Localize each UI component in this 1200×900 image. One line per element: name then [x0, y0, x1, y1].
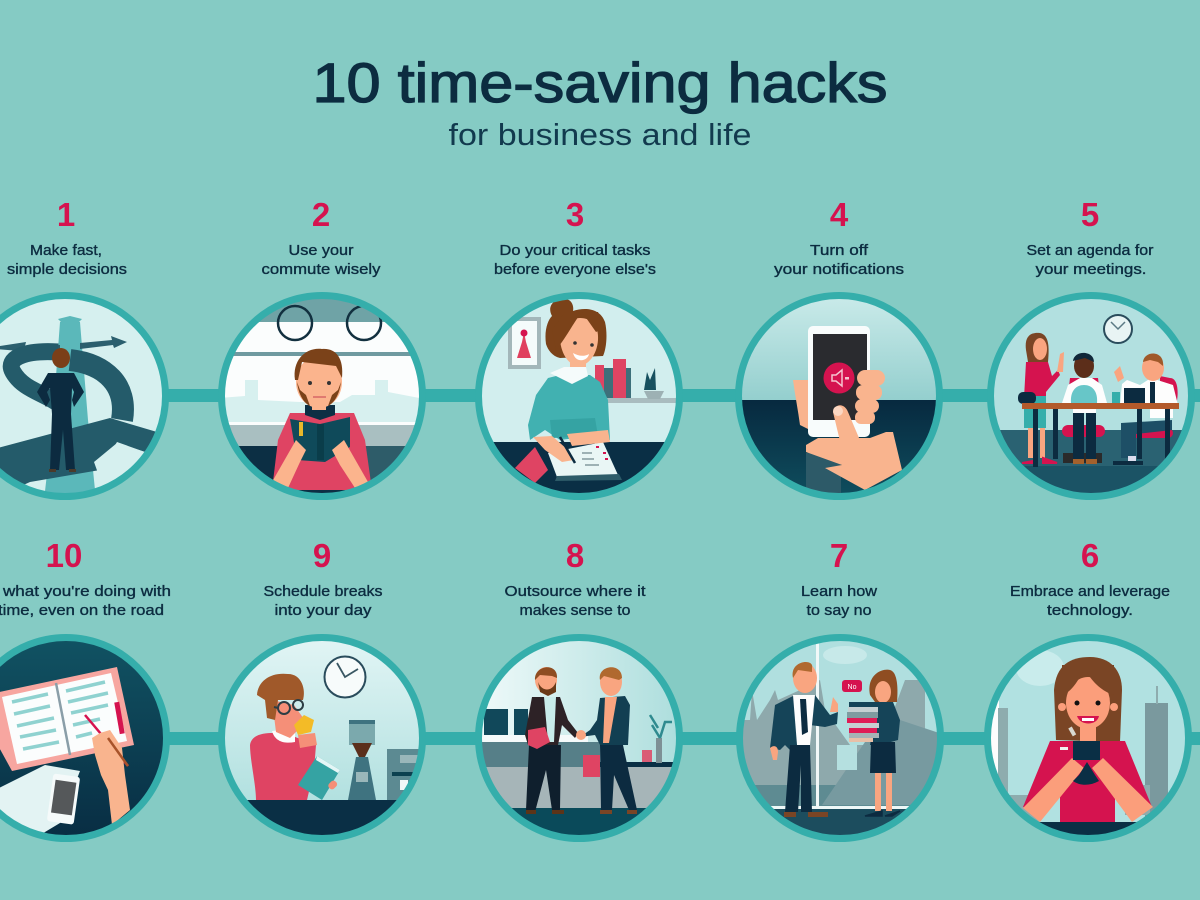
ring [478, 638, 680, 838]
man at laptop [1062, 353, 1107, 464]
panel: hack 7 [737, 537, 947, 849]
illustration: meeting [994, 299, 1188, 493]
text: hack 1 [7, 243, 127, 278]
man [770, 662, 838, 817]
text: hack 3 [494, 243, 656, 278]
text: hack 4: Turn off [810, 243, 869, 259]
text: hack 10: time, even on the road [0, 603, 164, 619]
text: hack 1: simple decisions [7, 262, 127, 278]
ring [0, 296, 166, 496]
woman [847, 670, 900, 816]
illustration: crossroads [0, 299, 162, 493]
illustration: reading on commute [225, 299, 419, 493]
panel: hack 3 [475, 196, 685, 502]
man right [576, 667, 637, 814]
coffee grinder [348, 720, 376, 800]
number 9: 9 [313, 537, 331, 574]
text: hack 8: Outsource where it [504, 584, 646, 600]
ring [990, 296, 1192, 496]
text: hack 3: before everyone else's [494, 262, 656, 278]
panel: hack 1 [0, 196, 170, 500]
text: hack 7: Learn how [801, 584, 878, 600]
panel: hack 5 [985, 196, 1195, 506]
illustration: coffee break [225, 641, 419, 835]
subtitle: for business and life [448, 117, 752, 152]
connector: bottom row [0, 732, 1200, 745]
man on right [1113, 353, 1178, 465]
text: hack 6: technology. [1047, 603, 1133, 619]
speech bubble: no: No [848, 684, 857, 691]
ring [222, 638, 422, 838]
text: hack 2 [262, 243, 381, 278]
illustration: woman at desk [482, 299, 676, 493]
illustration: learn to say no [743, 641, 937, 835]
ring [478, 296, 680, 496]
number 2: 2 [312, 196, 330, 233]
text: hack 6 [1010, 584, 1170, 619]
illustration: handshake [482, 641, 676, 835]
text: hack 7: to say no [806, 603, 872, 619]
number 6: 6 [1081, 537, 1099, 574]
illustration: woman with smartphone [991, 641, 1185, 835]
number 10: 10 [46, 537, 82, 574]
text: hack 9: into your day [274, 603, 372, 619]
text: hack 10 [0, 584, 171, 619]
connector: top row [0, 389, 1200, 402]
panel: hack 9 [220, 537, 430, 850]
clock [324, 656, 366, 698]
number 8: 8 [566, 537, 584, 574]
text: hack 4: your notifications [774, 262, 904, 278]
text: hack 7 [801, 584, 878, 619]
number 7: 7 [830, 537, 848, 574]
ring [222, 296, 422, 496]
number 5: 5 [1081, 196, 1099, 233]
text: hack 5 [1026, 243, 1154, 278]
text: hack 9: Schedule breaks [264, 584, 382, 600]
number 1: 1 [57, 196, 75, 233]
illustration: phone notifications [742, 299, 936, 493]
text: hack 1: Make fast, [30, 243, 102, 259]
text: hack 8: makes sense to [520, 603, 630, 619]
speech bubble: no [842, 680, 862, 692]
panel: hack 6 [985, 537, 1195, 852]
number 4: 4 [830, 196, 849, 233]
number 3: 3 [566, 196, 584, 233]
text: hack 10: what you're doing with [2, 584, 171, 600]
title: 10 time-saving hacks [312, 51, 888, 114]
ring [740, 638, 940, 838]
man left [525, 667, 578, 814]
text: hack 9 [264, 584, 382, 619]
text: hack 5: Set an agenda for [1026, 243, 1154, 259]
ring [988, 638, 1188, 838]
text: hack 2: Use your [288, 243, 354, 259]
panel: hack 10 [0, 537, 175, 845]
text: hack 2: commute wisely [262, 262, 381, 278]
text: hack 3: Do your critical tasks [500, 243, 650, 259]
text: hack 4 [774, 243, 904, 278]
text: hack 5: your meetings. [1036, 262, 1146, 278]
text: hack 6: Embrace and leverage [1010, 584, 1170, 600]
ring [738, 296, 940, 496]
panel: hack 4 [735, 196, 945, 500]
woman [1018, 333, 1064, 463]
panel: hack 8 [475, 537, 685, 848]
illustration: notebook and phone [0, 641, 163, 835]
ring [0, 638, 166, 838]
text: hack 8 [504, 584, 646, 619]
panel: hack 2 [220, 196, 430, 506]
